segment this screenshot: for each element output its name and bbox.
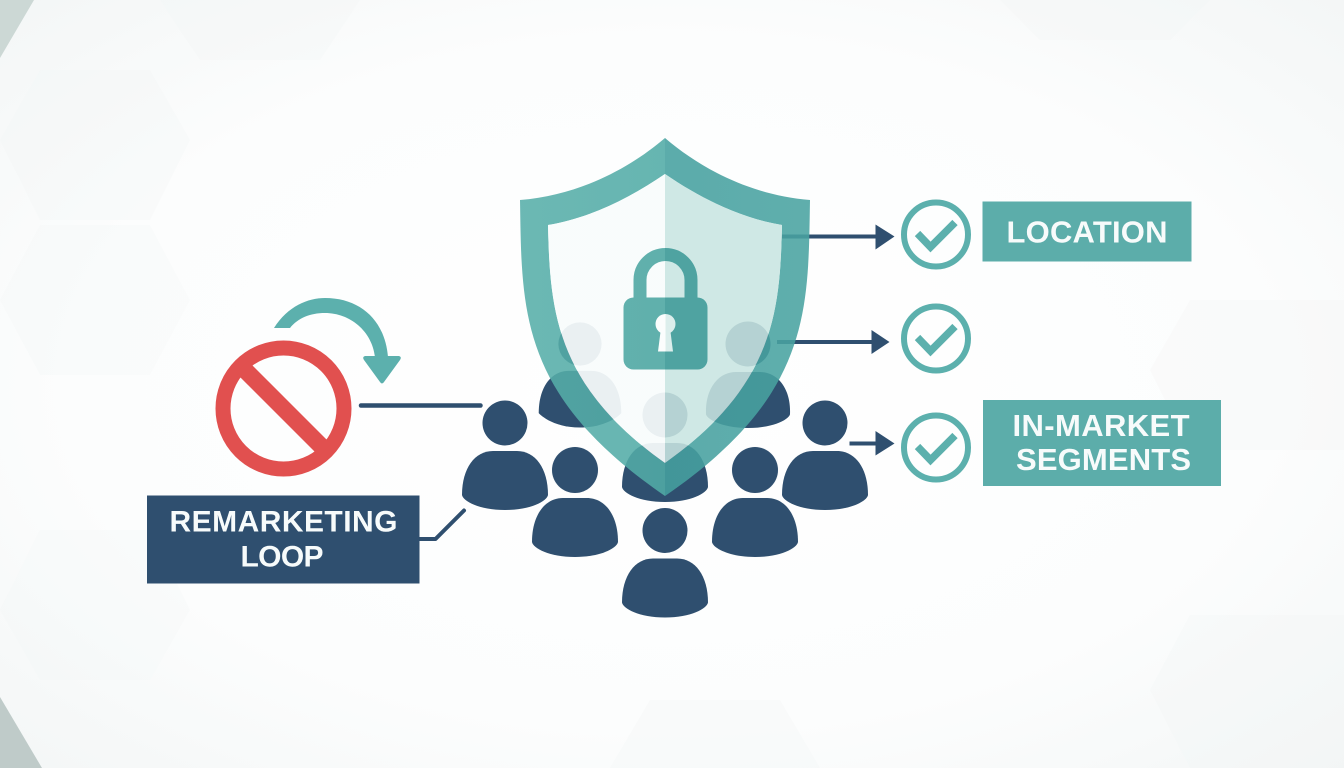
shield border [520,138,810,496]
person: front centre [622,508,708,618]
person: front right [712,447,798,557]
icon: prohibition sign [223,348,344,469]
icon: padlock [624,254,708,370]
label: remarketing loop: LOOP [240,540,324,574]
label: in-market segments [983,400,1221,486]
label: location: LOCATION [1006,214,1168,250]
person: middle centre [622,392,708,502]
check: middle [904,306,968,370]
label: remarketing loop [147,496,420,584]
person: back left [539,322,621,428]
padlock keyhole [656,314,676,352]
padlock shackle [640,254,691,298]
shield [520,138,810,496]
person: far left [462,400,548,510]
person: back right [706,322,790,428]
audience group [462,322,868,618]
arrow: shield to middle check [777,330,890,354]
label: in-market segments: IN-MARKET [1012,408,1190,443]
icon: circular loop arrow [274,298,401,384]
label: in-market segments: SEGMENTS [1016,442,1191,477]
corner accent: top left [0,0,34,58]
arrow: audience to in-market check [850,431,894,456]
padlock body [624,298,708,370]
person: far right [782,400,868,510]
arrow: shield to location check [782,224,894,250]
check: location [904,202,968,266]
shield inner panel [548,174,782,463]
check: in-market [904,416,968,480]
person: front left [532,447,618,557]
connector: remarketing label to audience [419,510,464,539]
label: location [982,202,1192,262]
corner accent: bottom left [0,697,42,768]
connector: prohibition sign to audience [361,403,480,408]
label: remarketing loop: REMARKETING [170,506,398,538]
